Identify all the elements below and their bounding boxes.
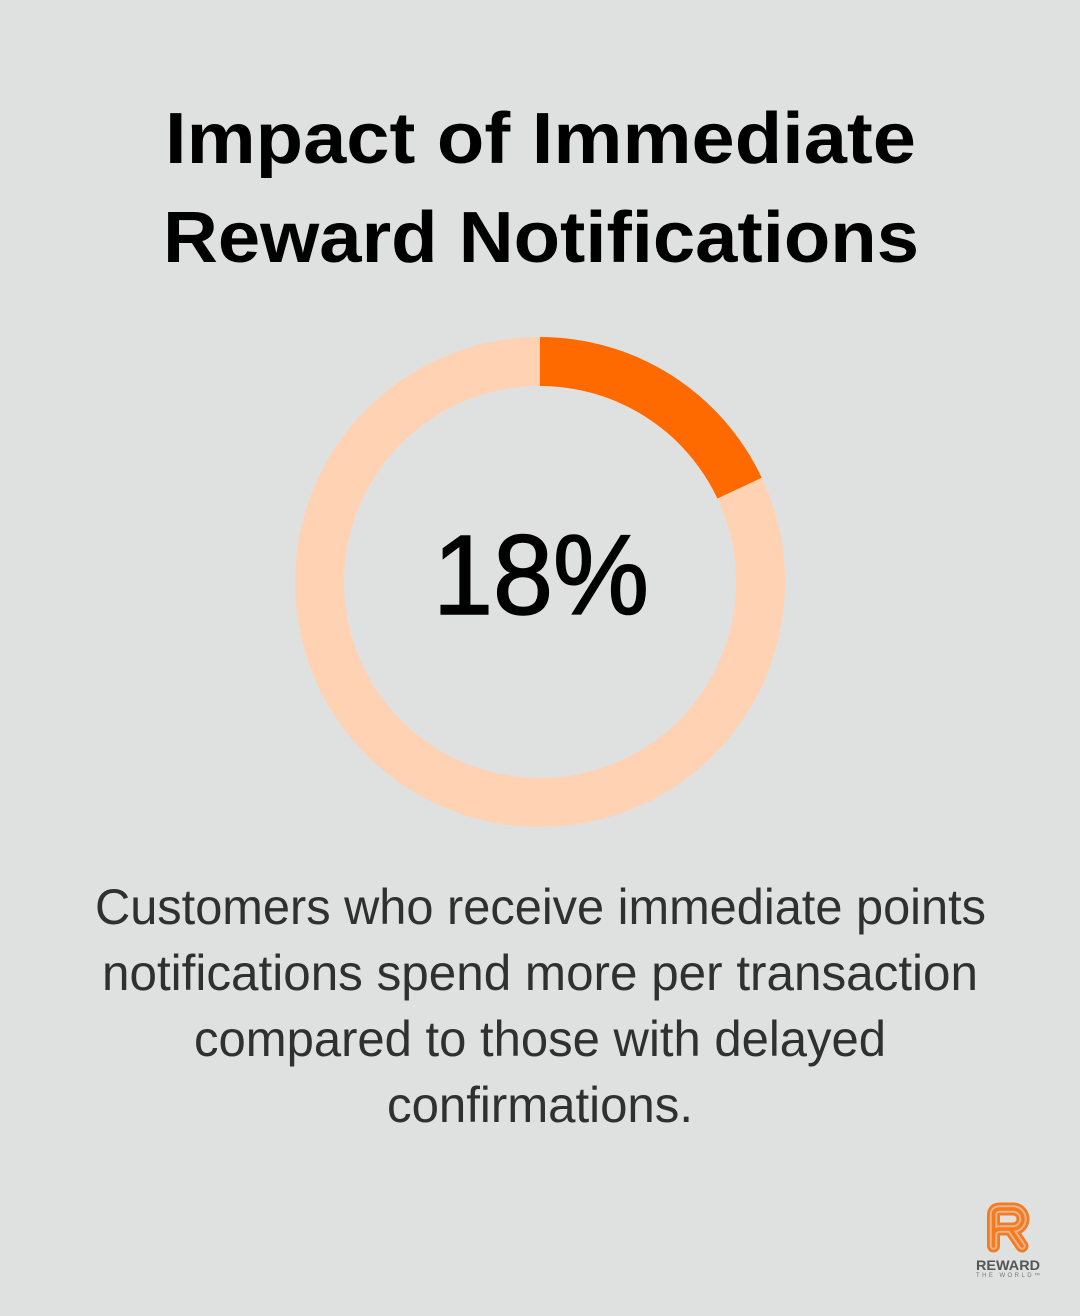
description text: Customers who receive immediate points	[95, 879, 986, 935]
donut chart: 18%	[320, 337, 762, 802]
description text: confirmations.	[387, 1077, 693, 1133]
description text: notifications spend more per transaction	[102, 945, 978, 1001]
title: Impact of Immediate	[165, 99, 916, 179]
description text	[95, 879, 986, 1133]
title: Reward Notifications	[163, 198, 919, 278]
description text: compared to those with delayed	[194, 1011, 886, 1067]
logo tagline: THE WORLD™	[976, 1272, 1040, 1279]
logo mark	[994, 1209, 1023, 1246]
logo: Reward the World	[976, 1209, 1040, 1279]
donut value: 18%	[433, 512, 649, 638]
title	[163, 99, 919, 278]
logo wordmark: REWARD	[976, 1257, 1040, 1273]
